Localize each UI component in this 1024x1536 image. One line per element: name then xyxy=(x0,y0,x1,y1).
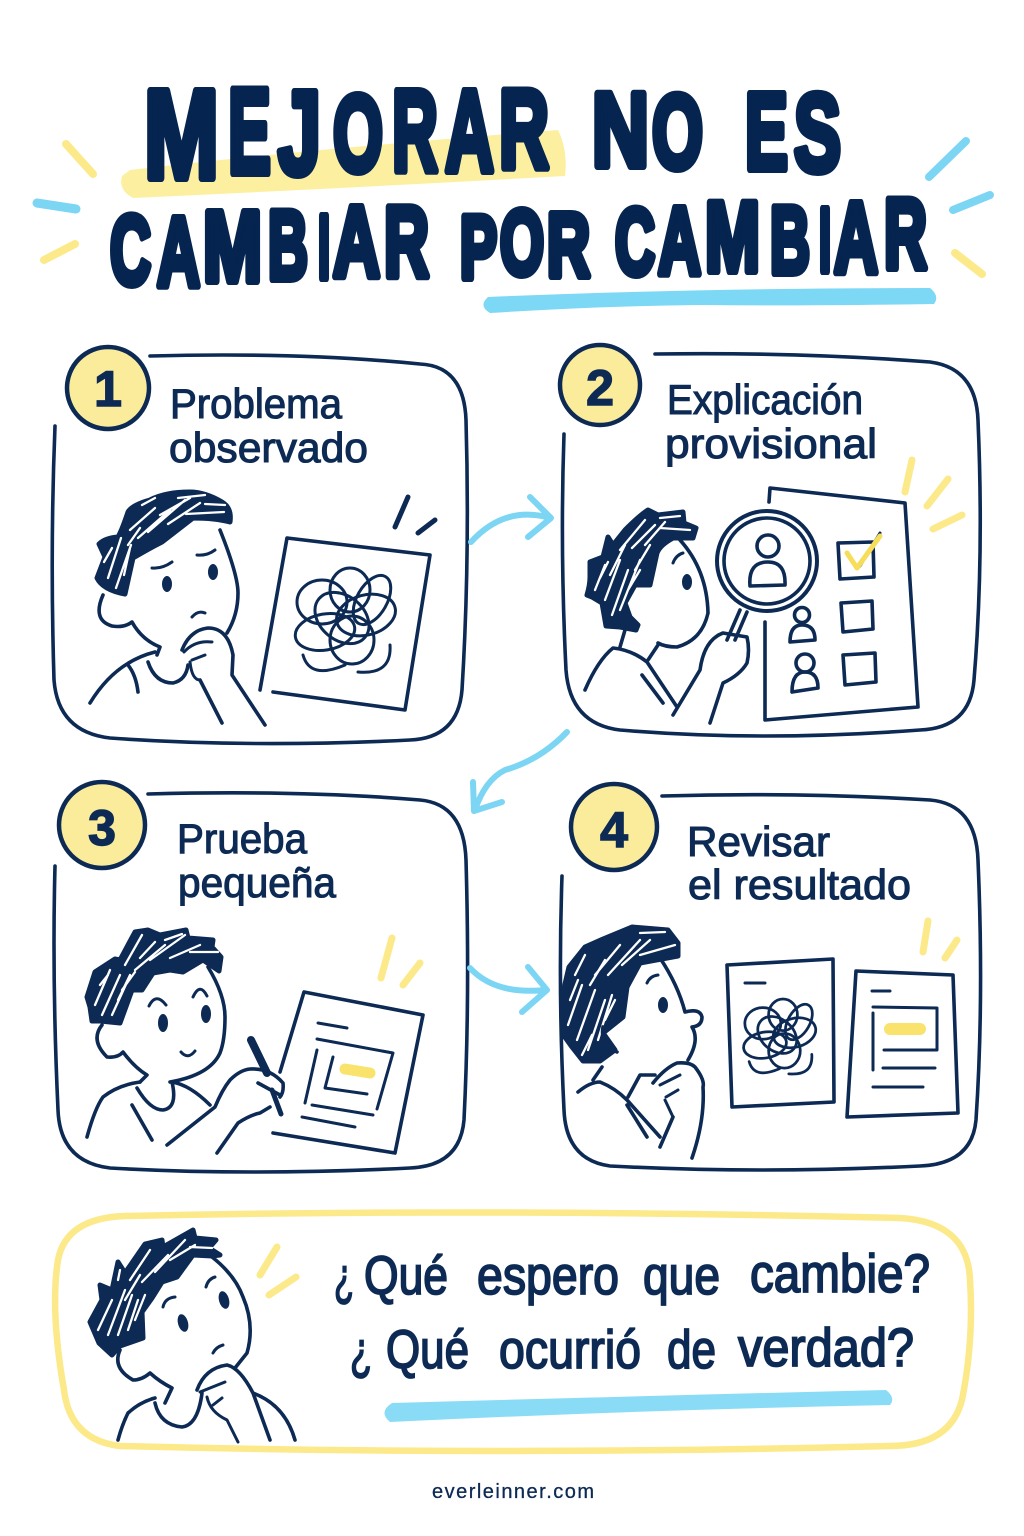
person writing xyxy=(87,930,283,1153)
title: O xyxy=(652,74,703,191)
heading 2: provisional xyxy=(665,420,877,467)
panel 4: revisar el resultado xyxy=(560,784,981,1170)
number badge 4 xyxy=(571,784,657,870)
title xyxy=(110,63,936,313)
arrow 2 to 3 xyxy=(473,732,567,811)
title: M xyxy=(144,64,219,205)
title: R xyxy=(884,178,927,289)
heading 3: Prueba xyxy=(177,815,308,862)
title: C xyxy=(615,189,655,294)
number badge 3 xyxy=(59,782,145,868)
panel 1: problema observado xyxy=(52,347,467,744)
title: P xyxy=(460,197,497,297)
title: N xyxy=(592,72,649,189)
reflection questions: de xyxy=(667,1320,716,1380)
arrow 1 to 2 xyxy=(471,497,551,542)
title: B xyxy=(268,190,308,300)
heading 2 xyxy=(665,376,877,467)
checklist with magnifier xyxy=(717,460,962,720)
title sparkles xyxy=(37,141,990,274)
reflection questions: ocurrió xyxy=(499,1320,641,1380)
scribble chart 1 xyxy=(260,497,435,710)
reflection questions: espero xyxy=(477,1246,619,1306)
heading 1 xyxy=(169,380,368,471)
two comparison sheets xyxy=(727,921,958,1117)
person with magnifier xyxy=(585,510,748,723)
title: O xyxy=(500,192,544,294)
title: A xyxy=(834,182,878,294)
heading 3 xyxy=(177,815,337,906)
heading 4: Revisar xyxy=(687,818,830,865)
panel 2: explicacion provisional xyxy=(560,345,980,736)
title: M xyxy=(203,191,262,303)
title: R xyxy=(499,67,549,192)
number badge 3: 3 xyxy=(88,800,116,856)
title: E xyxy=(745,71,788,193)
heading 3: pequeña xyxy=(178,859,337,906)
reflection questions: ¿ xyxy=(334,1247,354,1307)
number badge 2: 2 xyxy=(586,360,614,416)
person thinking 1 xyxy=(90,492,265,725)
title: E xyxy=(228,63,271,199)
title: A xyxy=(333,186,380,298)
title: B xyxy=(770,187,810,294)
heading 4: el resultado xyxy=(688,861,911,908)
title: A xyxy=(157,197,200,307)
number badge 1 xyxy=(67,347,149,429)
heading 1: observado xyxy=(169,424,368,471)
heading 1: Problema xyxy=(170,380,343,427)
number badge 4: 4 xyxy=(600,802,628,858)
title: C xyxy=(110,195,151,305)
reflection questions: cambie? xyxy=(750,1244,930,1304)
title: A xyxy=(658,188,701,295)
thinking person xyxy=(90,1230,296,1442)
title: S xyxy=(794,72,841,195)
heading 2: Explicación xyxy=(667,376,863,423)
reflection questions: que xyxy=(643,1246,720,1306)
title: I xyxy=(819,191,831,291)
title: J xyxy=(278,67,321,200)
arrow 3 to 4 xyxy=(470,967,547,1012)
person comparing xyxy=(562,927,703,1158)
title: R xyxy=(547,196,590,296)
panel 3: prueba pequena xyxy=(54,782,468,1172)
number badge 2 xyxy=(560,345,640,425)
title: A xyxy=(445,66,494,196)
reflection questions: Qué xyxy=(364,1246,448,1306)
number badge 1: 1 xyxy=(94,361,122,417)
reflection panel xyxy=(55,1212,971,1451)
reflection questions: verdad? xyxy=(738,1318,914,1378)
heading 4 xyxy=(687,818,911,908)
title: R xyxy=(384,186,429,298)
reflection questions: Qué xyxy=(386,1320,469,1380)
reflection questions: ¿ xyxy=(350,1321,372,1381)
title: O xyxy=(333,73,383,195)
reflection questions xyxy=(334,1244,930,1422)
footer url: everleinner.com xyxy=(432,1481,594,1503)
title: I xyxy=(318,198,330,298)
title: R xyxy=(392,66,438,196)
title: M xyxy=(705,181,760,292)
draft page with highlight xyxy=(273,938,423,1153)
